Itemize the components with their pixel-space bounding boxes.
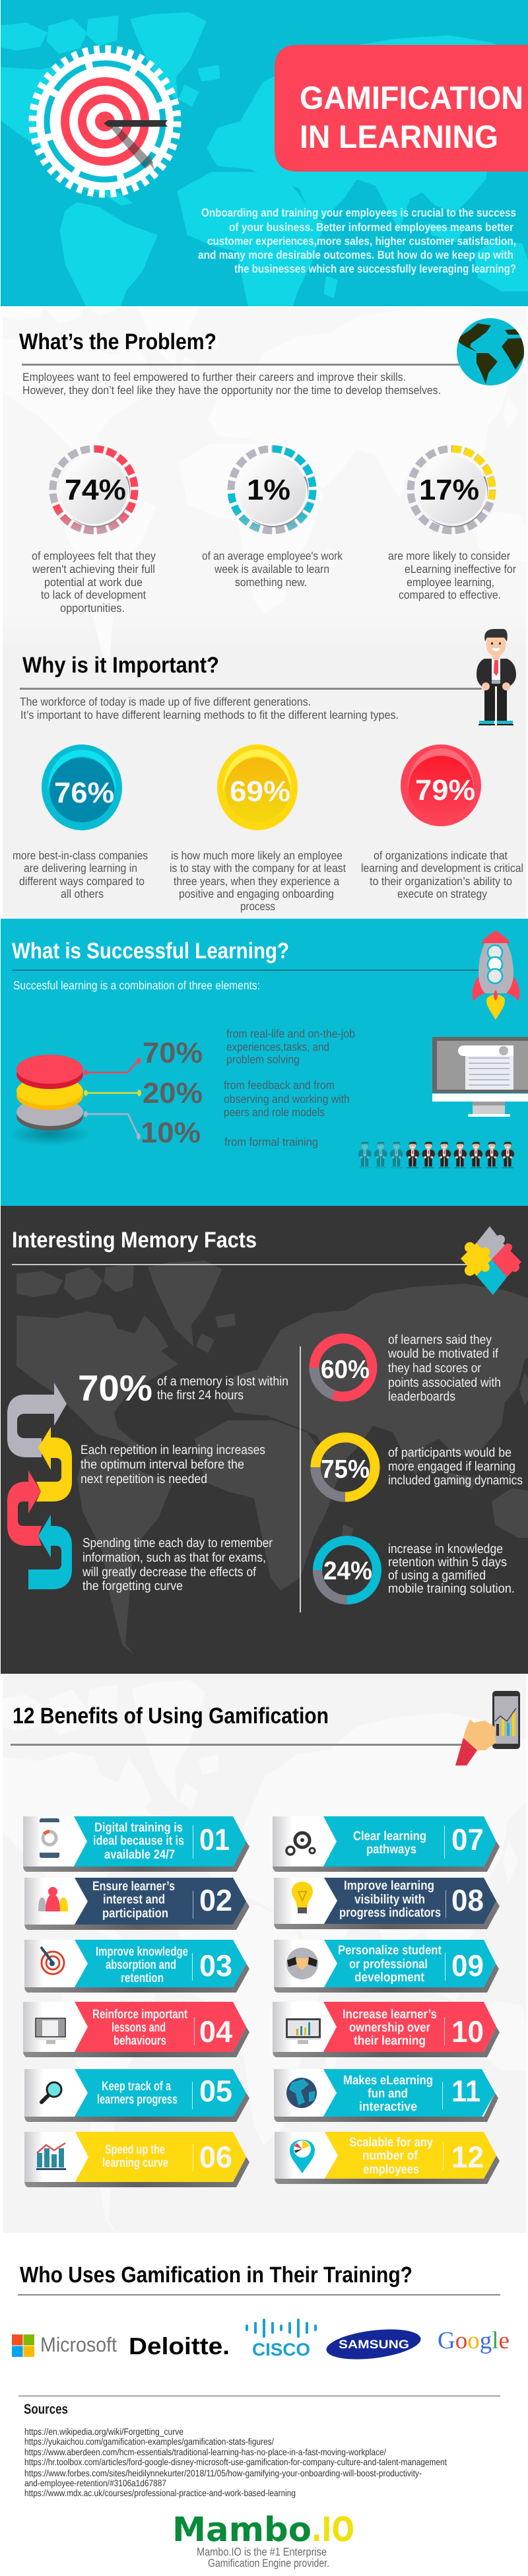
caption: 60%: of learners said they	[388, 1333, 492, 1347]
benefit card 12: Scalable for any	[349, 2135, 433, 2150]
heading: Why is it Important: Why is it Important?	[22, 653, 219, 678]
stat ring: 60%	[314, 1338, 372, 1397]
benefit card 11: Makes eLearning	[343, 2073, 433, 2088]
benefit card 08: 08	[451, 1883, 484, 1917]
caption: 1%	[202, 549, 343, 589]
stat circle: 79%: 79%	[415, 774, 475, 807]
stat ring: 75%: 75%	[321, 1455, 370, 1484]
caption: 60%: would be motivated if	[387, 1346, 499, 1361]
logo: Deloitte: Deloitte.	[129, 2332, 230, 2360]
benefit card 07: Clear learning	[353, 1829, 426, 1843]
benefit card 01: Digital training is	[94, 1820, 183, 1835]
stat: 20%: peers and role models	[224, 1106, 325, 1119]
icon: globe	[457, 318, 525, 385]
benefit card 08: Improve learning	[344, 1878, 434, 1893]
stat ring: 1%	[230, 448, 314, 531]
stat: 70%: from real-life and on-the-job	[226, 1027, 355, 1040]
sources list: https://en.wikipedia.org/wiki/Forgetting_curve	[24, 2426, 183, 2437]
stat: 10%	[141, 1117, 318, 1149]
tagline: Gamification Engine provider.	[208, 2557, 329, 2569]
hero world map background	[1, 12, 528, 306]
caption: 74%: weren't achieving their full	[32, 562, 155, 576]
chart: stacked discs	[9, 1055, 141, 1146]
sources list: https://hr.toolbox.com/articles/ford-google-disney-microsoft-use-gamification-for-company-culture-and-talent-management	[24, 2457, 447, 2467]
caption: 76%: different ways compared to	[19, 875, 145, 888]
benefit card 01: available 24/7	[104, 1847, 175, 1862]
logo: Mambo.IO: Mambo	[172, 2511, 312, 2550]
importance description: The workforce of today is made up of five different generations.	[20, 695, 311, 708]
stat ring: 74%: 74%	[65, 474, 126, 506]
caption: 17%: employee learning,	[407, 576, 494, 589]
benefit card 10: ownership over	[349, 2020, 430, 2035]
text: spending time: will greatly decrease the effects of	[82, 1565, 257, 1579]
caption: 74%	[32, 549, 156, 614]
caption: 17%: compared to effective.	[399, 588, 501, 601]
text: repetition	[81, 1443, 265, 1486]
text: repetition: Each repetition in learning increases	[81, 1443, 265, 1457]
text: spending time: information, such as that for exams,	[82, 1550, 266, 1565]
logo: Microsoft: Microsoft	[40, 2333, 117, 2356]
caption: 17%	[388, 549, 516, 601]
stat circle: 79%	[401, 744, 481, 826]
caption: 74%: potential at work due	[44, 576, 143, 589]
caption: 24%: retention within 5 days	[388, 1555, 507, 1569]
subheading: Succesful learning is a combination of three elements:	[13, 979, 260, 992]
benefit card 10: their learning	[354, 2033, 426, 2048]
caption: 69%: three years, when they experience a	[174, 875, 339, 888]
section: hero banner	[1, 0, 528, 306]
caption: 1%: something new.	[235, 576, 307, 589]
text: repetition: next repetition is needed	[81, 1472, 207, 1486]
benefit card 02: participation	[102, 1906, 168, 1921]
benefit card 02: Ensure learner’s	[92, 1879, 175, 1894]
benefit card 12: employees	[363, 2162, 419, 2177]
caption: 74%: opportunities.	[60, 601, 125, 614]
benefit card 04	[23, 2002, 249, 2057]
heading: What's the Problem	[19, 329, 464, 366]
benefit card 03: absorption and	[106, 1958, 176, 1972]
benefit card 09: development	[354, 1970, 424, 1985]
icon: hand on phone with chart	[455, 1691, 520, 1766]
benefit card 04: lessons and	[112, 2020, 166, 2035]
benefit card 09: 09	[451, 1948, 484, 1983]
stat: 70% memory: 70%	[78, 1368, 152, 1408]
benefit card 01: ideal because it is	[93, 1833, 184, 1848]
title text: IN LEARNING	[300, 119, 498, 155]
heading: What's the Problem: What’s the Problem?	[19, 329, 216, 354]
benefit card 09: Personalize student	[338, 1943, 442, 1958]
caption: 24%: increase in knowledge	[388, 1542, 503, 1556]
importance description: It’s important to have different learning methods to fit the different learning types.	[20, 708, 399, 721]
caption: 24%	[388, 1542, 515, 1596]
heading: Why is it Important	[20, 653, 482, 690]
caption: 69%: positive and engaging onboarding	[179, 887, 334, 900]
benefit card 03: retention	[121, 1971, 164, 1985]
caption: 69%: is how much more likely an employee	[171, 849, 343, 862]
stat ring: 17%	[410, 448, 493, 531]
section: What is Successful Learning	[1, 919, 528, 1206]
tagline: Mambo.IO is the #1 Enterprise	[197, 2546, 327, 2558]
tagline	[197, 2546, 329, 2569]
benefit card 12: number of	[362, 2148, 418, 2163]
heading: 12 Benefits: 12 Benefits of Using Gamification	[13, 1703, 329, 1729]
stat: 70%: experiences,tasks, and	[226, 1040, 329, 1053]
caption: 75%: of participants would be	[388, 1445, 512, 1460]
stat ring: 60%: 60%	[321, 1356, 370, 1384]
benefit card 11: interactive	[359, 2099, 417, 2114]
heading: Successful Learning: What is Successful Learning?	[12, 939, 289, 964]
icon: businessman	[477, 629, 516, 725]
caption: 76%	[13, 849, 148, 900]
sources list: and-employee-retention/#3106a1d67887	[24, 2478, 166, 2488]
caption: 79%: execute on strategy	[397, 887, 487, 900]
logo: Microsoft	[12, 2333, 117, 2357]
problem description: However, they don’t feel like they have the opportunity nor the time to develop themselves.	[22, 383, 441, 397]
stat: 70%: 70%	[143, 1037, 203, 1069]
benefit card 12	[275, 2132, 500, 2184]
text: spending time: Spending time each day to remember	[82, 1536, 273, 1550]
benefit card 08: progress indicators	[339, 1905, 441, 1920]
icon: rocket	[473, 931, 519, 1020]
stat ring: 17%: 17%	[419, 474, 479, 506]
benefit card 08	[274, 1878, 500, 1929]
caption: 24%: mobile training solution.	[388, 1581, 515, 1596]
stat ring: 75%	[315, 1437, 375, 1497]
benefit card 02	[24, 1878, 249, 1930]
benefit card 07	[273, 1816, 500, 1872]
caption: 24%: of using a gamified	[388, 1568, 486, 1583]
benefit card 09	[274, 1940, 499, 1993]
benefit card 05: Keep track of a	[102, 2079, 171, 2094]
sources list: https://www.mdx.ac.uk/courses/professional-practice-and-work-based-learning	[24, 2488, 296, 2498]
benefit card 04: behaviours	[114, 2033, 166, 2048]
caption: 60%: points associated with	[388, 1375, 501, 1390]
stat: 20%: 20%	[143, 1077, 203, 1109]
benefit card 03: 03	[199, 1948, 232, 1983]
caption: 1%: week is available to learn	[214, 562, 329, 576]
benefit card 11: fun and	[368, 2086, 408, 2101]
caption: 76%: more best-in-class companies	[13, 849, 148, 862]
stat: 70%: problem solving	[226, 1053, 300, 1066]
benefit card 12: 12	[451, 2140, 484, 2174]
stat ring: 1%: 1%	[247, 474, 290, 506]
caption: 60%: they had scores or	[388, 1361, 481, 1375]
sources list	[24, 2426, 447, 2498]
logo: Cisco: CISCO	[252, 2340, 310, 2360]
logo: Cisco	[246, 2319, 317, 2360]
icon: repetition arrows	[7, 1383, 72, 1589]
icon: monitor with document	[432, 1037, 528, 1117]
sources list: https://www.aberdeen.com/hcm-essentials/traditional-learning-has-no-place-in-a-fast-moving-workplace/	[24, 2447, 386, 2457]
section: 12 Benefits	[0, 1674, 528, 2235]
caption: 76%: are delivering learning in	[24, 861, 137, 875]
caption: 79%	[361, 849, 523, 900]
section: Interesting Memory Facts	[1, 1206, 528, 1674]
caption: 17%: eLearning ineffective for	[405, 562, 516, 576]
caption: 69%	[170, 849, 346, 913]
stat: 20%: observing and working with	[224, 1092, 350, 1106]
caption: 75%	[388, 1445, 523, 1488]
benefit card 05	[24, 2069, 249, 2122]
dark world map background	[16, 1261, 528, 1655]
caption: 69%: process	[240, 900, 275, 913]
caption: 76%: all others	[61, 887, 104, 900]
caption: 17%: are more likely to consider	[388, 549, 510, 562]
benefit card 01	[23, 1816, 249, 1872]
stat: 70% memory: the first 24 hours	[157, 1388, 244, 1403]
stat: 10%: from formal training	[224, 1135, 318, 1148]
sources list: https://yukaichou.com/gamification-examples/gamification-stats-figures/	[24, 2436, 274, 2447]
caption: 79%: of organizations indicate that	[374, 849, 508, 862]
stat: 70% memory: of a memory is lost within	[157, 1374, 288, 1389]
benefit card 07: 07	[451, 1822, 484, 1857]
benefit card 05: 05	[199, 2074, 232, 2108]
benefit card 05: learners progress	[97, 2092, 178, 2107]
benefit card 02: interest and	[103, 1892, 165, 1907]
benefit card 09: or professional	[349, 1957, 428, 1971]
benefit card 03: Improve knowledge	[96, 1944, 188, 1959]
benefit card 06	[24, 2132, 249, 2187]
caption: 69%: is to stay with the company for at least	[170, 861, 346, 875]
text: spending time	[82, 1536, 273, 1593]
heading: 12 Benefits	[11, 1703, 469, 1746]
importance description	[20, 695, 399, 721]
benefit card 02: 02	[199, 1883, 232, 1917]
benefit card 06: learning curve	[102, 2156, 168, 2170]
stat ring: 74%	[52, 448, 135, 531]
heading: Memory Facts: Interesting Memory Facts	[12, 1228, 257, 1253]
stat: 20%	[143, 1077, 350, 1119]
benefit card 06: Speed up the	[105, 2142, 165, 2157]
title text: GAMIFICATION	[300, 81, 523, 116]
benefit card 11	[274, 2069, 498, 2122]
stat circle: 69%	[217, 744, 298, 830]
stat ring: 24%	[317, 1540, 377, 1600]
benefit card 04: Reinforce important	[92, 2007, 187, 2022]
stat: 20%: from feedback and from	[224, 1078, 335, 1092]
heading: Who Uses Gamification: Who Uses Gamification in Their Training?	[20, 2262, 412, 2288]
text: spending time: the forgetting curve	[82, 1579, 183, 1593]
icon: row of ten people	[358, 1142, 514, 1168]
icon: gear with target and arrow	[33, 50, 177, 193]
stat circle: 69%: 69%	[230, 776, 290, 808]
benefit card 06: 06	[199, 2140, 232, 2174]
benefit card 07: pathways	[366, 1842, 416, 1857]
problem description: Employees want to feel empowered to further their careers and improve their skills.	[22, 370, 406, 383]
benefit card 03	[24, 1940, 249, 1993]
benefit card 10	[273, 2002, 500, 2057]
intro paragraph	[198, 206, 516, 275]
logo: Samsung: SAMSUNG	[339, 2338, 409, 2351]
benefit card 10: 10	[451, 2014, 484, 2049]
caption: 60%: leaderboards	[388, 1389, 455, 1404]
title banner	[275, 45, 528, 172]
benefit card 04: 04	[199, 2014, 232, 2049]
caption: 79%: to their organization’s ability to	[370, 875, 512, 888]
caption: 75%: more engaged if learning	[388, 1459, 515, 1474]
logo: Mambo.IO: .IO	[312, 2511, 354, 2550]
stat: 70% memory	[78, 1368, 288, 1408]
benefit card 01: 01	[199, 1822, 230, 1857]
logo: Samsung	[325, 2325, 422, 2364]
text: repetition: the optimum interval before the	[81, 1457, 244, 1472]
stat: 70%	[143, 1027, 355, 1069]
caption: 1%: of an average employee's work	[202, 549, 343, 562]
stat: 10%: 10%	[141, 1117, 201, 1149]
benefit card 11: 11	[451, 2074, 480, 2108]
stat circle: 76%	[42, 744, 122, 830]
title text	[300, 81, 523, 155]
icon: puzzle pieces	[461, 1226, 521, 1295]
benefit card 10: Increase learner’s	[343, 2007, 437, 2022]
caption: 74%: to lack of development	[41, 588, 146, 601]
light section background	[3, 613, 526, 919]
sources list: https://www.forbes.com/sites/heidilynnekurter/2018/11/05/how-gamifying-your-onboarding-will-boost-productivity-	[24, 2468, 422, 2478]
sources heading: Sources	[24, 2402, 68, 2417]
logo: Google: Google	[438, 2327, 510, 2354]
stat circle: 76%: 76%	[54, 777, 114, 809]
caption: 74%: of employees felt that they	[32, 549, 156, 562]
benefit card 08: visibility with	[354, 1892, 425, 1907]
caption: 60%	[387, 1333, 501, 1404]
problem description	[22, 370, 441, 397]
stat ring: 24%: 24%	[323, 1557, 372, 1585]
